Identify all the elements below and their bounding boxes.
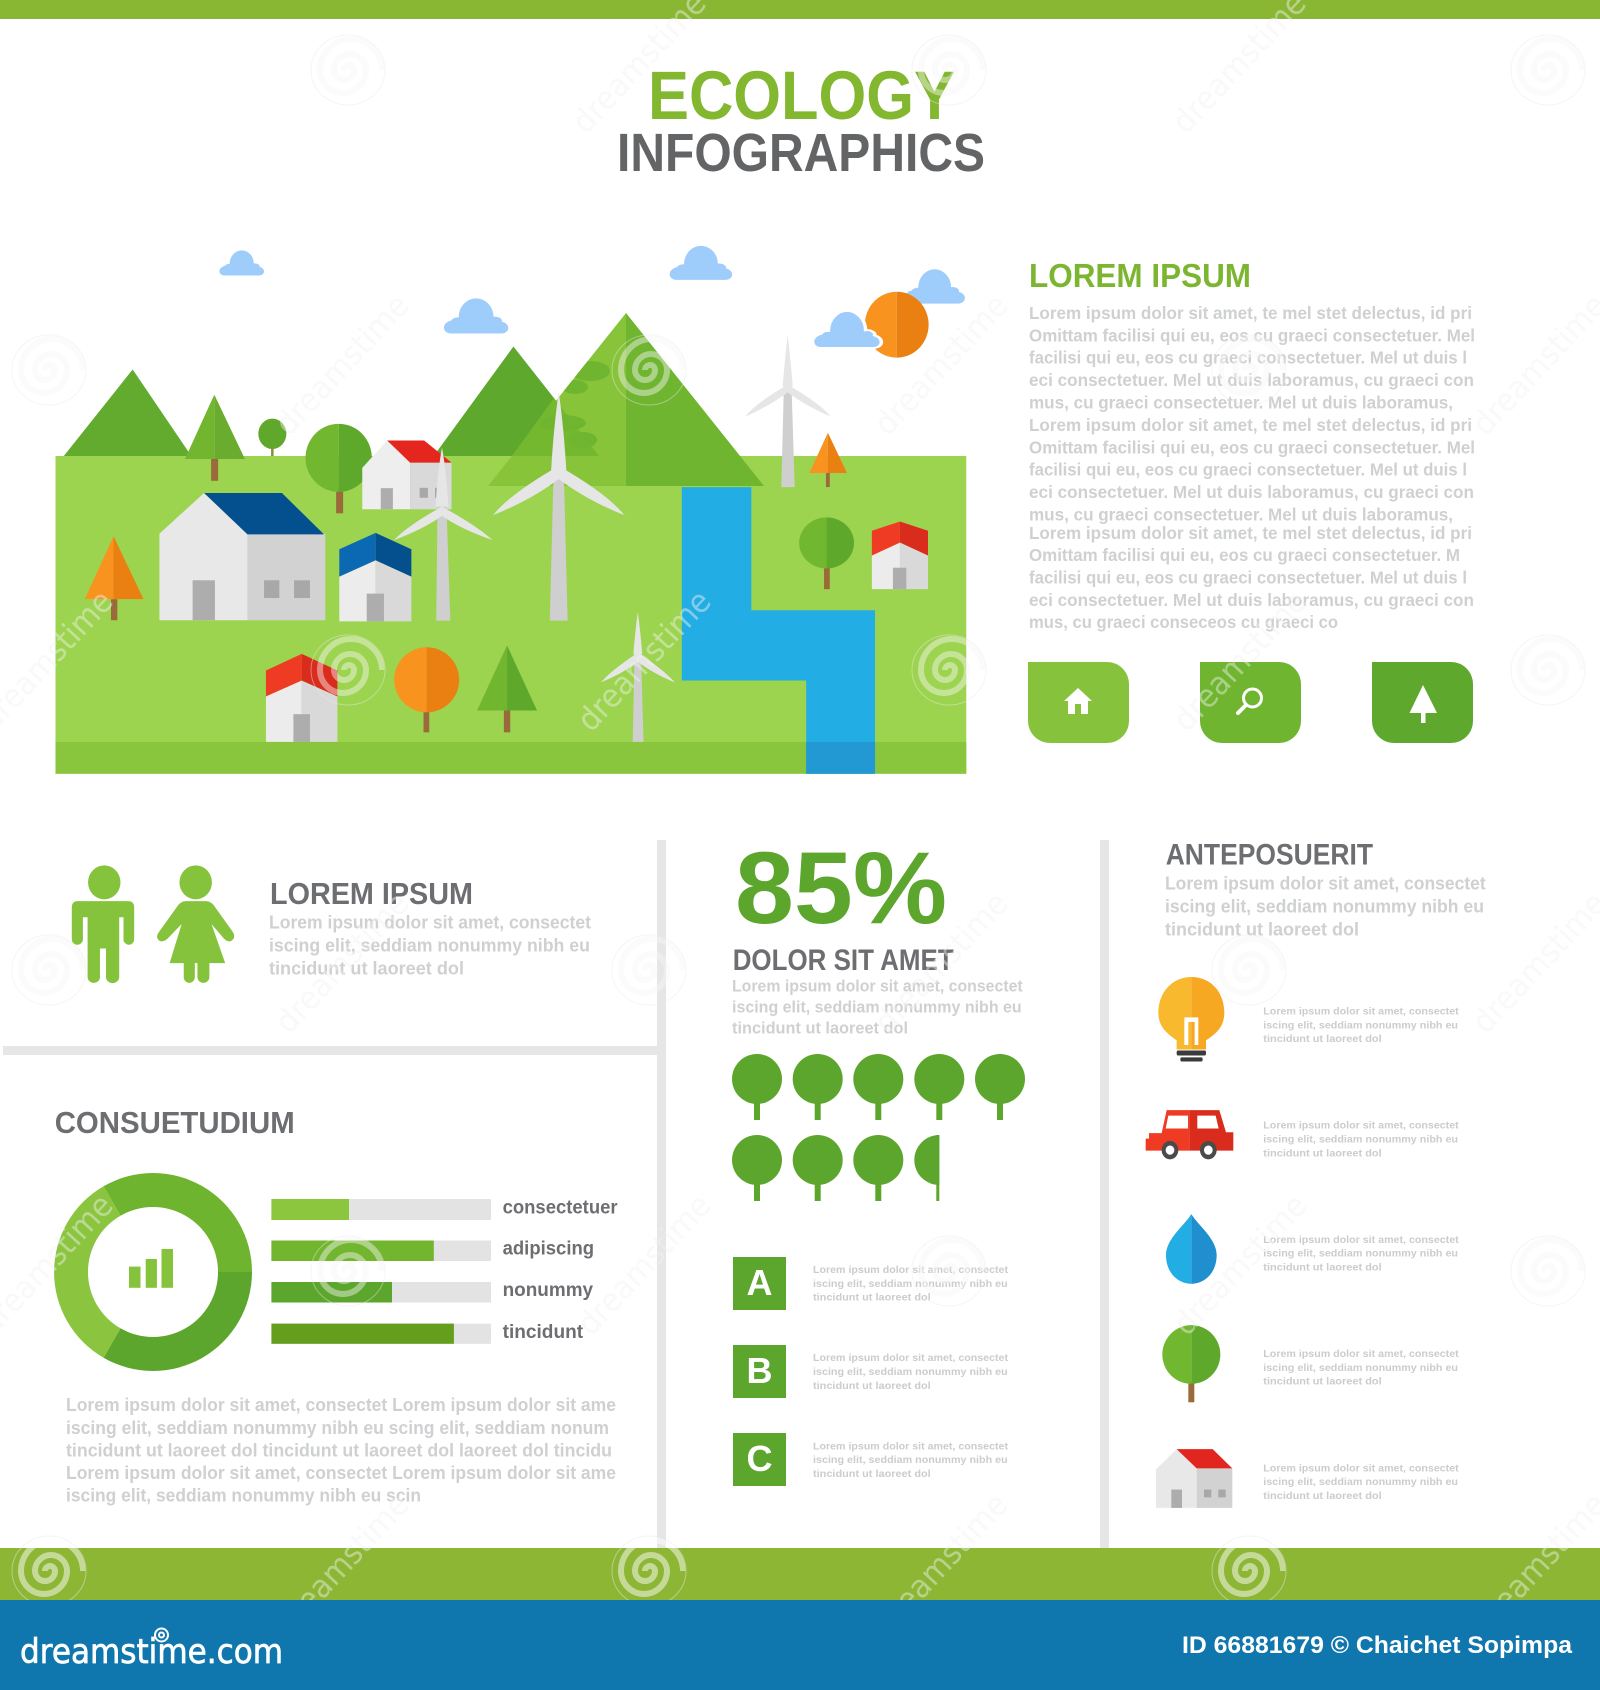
item text: house	[1263, 1462, 1459, 1502]
text block: tincidunt ut laoreet dol	[732, 1018, 908, 1037]
item B: tincidunt ut laoreet dol	[813, 1380, 931, 1392]
donut chart	[54, 1173, 252, 1371]
panel: statistics	[732, 831, 1025, 1486]
orange cone tree left	[85, 536, 144, 620]
small tree	[258, 419, 286, 456]
item B: Lorem ipsum dolor sit amet, consectet	[813, 1352, 1009, 1364]
item text: car: tincidunt ut laoreet dol	[1263, 1147, 1382, 1159]
heading: lorem ipsum green: LOREM IPSUM	[1029, 257, 1251, 294]
watermark overlay: dreamstime	[1165, 582, 1315, 739]
item text: water: iscing elit, seddiam nonummy nibh eu	[1263, 1248, 1458, 1260]
panel: people	[72, 865, 591, 983]
wind turbine lower	[601, 612, 675, 742]
item text: car	[1263, 1119, 1459, 1159]
item A: tincidunt ut laoreet dol	[813, 1292, 931, 1304]
pine tree	[185, 395, 245, 481]
text block: iscing elit, seddiam nonummy nibh eu scing elit, seddiam nonum	[66, 1418, 609, 1438]
panel divider: vertical right	[1100, 840, 1109, 1548]
item text: car: iscing elit, seddiam nonummy nibh eu	[1263, 1134, 1458, 1146]
item B: B	[746, 1350, 772, 1391]
footer logo spiral	[155, 1628, 168, 1642]
long body text: eci consectetuer. Mel ut duis laboramus, cu graeci con	[1029, 482, 1474, 502]
item A	[733, 1257, 1009, 1310]
icon: water drop	[1166, 1214, 1217, 1284]
bar chart: tincidunt	[503, 1322, 584, 1343]
clouds and sun	[219, 246, 965, 358]
long body text: Lorem ipsum dolor sit amet, te mel stet delectus, id pri	[1029, 523, 1472, 543]
long body text: eci consectetuer. Mel ut duis laboramus, cu graeci con	[1029, 590, 1474, 610]
item text: car: Lorem ipsum dolor sit amet, consectet	[1263, 1119, 1459, 1131]
text block: iscing elit, seddiam nonummy nibh eu	[1165, 897, 1484, 917]
text block: tincidunt ut laoreet dol	[269, 959, 464, 979]
title line: infographics: INFOGRAPHICS	[617, 123, 985, 183]
text block: iscing elit, seddiam nonummy nibh eu	[269, 936, 590, 956]
item B	[733, 1345, 1009, 1398]
bar chart: nonummy	[503, 1280, 594, 1301]
text block	[1165, 874, 1486, 940]
item C	[733, 1433, 1009, 1486]
title	[617, 57, 985, 183]
big mountain	[488, 313, 764, 486]
heading: anteposuerit: ANTEPOSUERIT	[1166, 838, 1373, 871]
long body text: Lorem ipsum dolor sit amet, te mel stet delectus, id pri	[1029, 303, 1472, 323]
watermark overlay: dreamstime	[866, 1485, 1016, 1642]
item text: house: tincidunt ut laoreet dol	[1263, 1490, 1382, 1502]
icon: bar chart	[129, 1249, 173, 1288]
watermark overlay: dreamstime	[569, 582, 719, 739]
watermark overlay: dreamstime	[267, 1485, 417, 1642]
top red house	[362, 440, 452, 509]
title line: ecology: ECOLOGY	[648, 57, 955, 134]
watermark overlay: dreamstime	[267, 286, 417, 443]
mountains behind	[64, 347, 600, 456]
long body text: mus, cu graeci conseceos cu graeci co	[1029, 612, 1338, 632]
icon: house	[1156, 1449, 1232, 1508]
button: tree	[1372, 662, 1473, 743]
long body text: Omittam facilisi qui eu, eos cu graeci consectetuer. Mel	[1029, 325, 1475, 345]
long body text: facilisi qui eu, eos cu graeci consectetuer. Mel ut duis l	[1029, 568, 1467, 588]
tree by river	[799, 517, 854, 589]
icon: woman	[157, 865, 234, 983]
watermark overlay: dreamstime	[866, 884, 1016, 1041]
small red house right	[872, 521, 928, 589]
grass field	[55, 456, 966, 774]
text block: Lorem ipsum dolor sit amet, consectet	[732, 977, 1023, 996]
item text: tree	[1263, 1348, 1459, 1388]
button: search	[1200, 662, 1301, 743]
long body text: Omittam facilisi qui eu, eos cu graeci consectetuer. Mel	[1029, 437, 1475, 457]
wind turbine small middle	[394, 447, 492, 621]
footer credit: ID 66881679 © Chaichet Sopimpa	[1182, 1632, 1573, 1659]
panel: anteposuerit	[1146, 838, 1486, 1508]
long body text: eci consectetuer. Mel ut duis laboramus, cu graeci con	[1029, 370, 1474, 390]
pictogram: trees 85 percent	[732, 1054, 1025, 1201]
orange cone tree far	[809, 433, 847, 487]
top green bar	[0, 0, 1600, 19]
text block: Lorem ipsum dolor sit amet, consectet Lorem ipsum dolor sit ame	[66, 1395, 616, 1415]
large house blue roof	[159, 493, 325, 620]
text block	[66, 1395, 616, 1506]
item text: house: Lorem ipsum dolor sit amet, consectet	[1263, 1462, 1459, 1474]
long body text: mus, cu graeci consectetuer. Mel ut duis laboramus,	[1029, 504, 1453, 524]
item text: tree: iscing elit, seddiam nonummy nibh eu	[1263, 1362, 1458, 1374]
item text: tree: Lorem ipsum dolor sit amet, consectet	[1263, 1348, 1459, 1360]
text block: Lorem ipsum dolor sit amet, consectet	[1165, 874, 1486, 894]
item text: bulb: Lorem ipsum dolor sit amet, consectet	[1263, 1006, 1459, 1018]
item A: A	[746, 1262, 772, 1303]
long body text: Omittam facilisi qui eu, eos cu graeci consectetuer. M	[1029, 545, 1460, 565]
orange round tree	[394, 647, 459, 732]
text block	[732, 977, 1023, 1037]
item text: tree: tincidunt ut laoreet dol	[1263, 1376, 1382, 1388]
text block: iscing elit, seddiam nonummy nibh eu scin	[66, 1486, 421, 1506]
watermark overlay: dreamstime	[569, 1186, 719, 1343]
item text: bulb: iscing elit, seddiam nonummy nibh eu	[1263, 1019, 1458, 1031]
text block: iscing elit, seddiam nonummy nibh eu	[732, 998, 1022, 1017]
item C: tincidunt ut laoreet dol	[813, 1468, 931, 1480]
round tree	[306, 424, 372, 513]
panel: consuetudium	[54, 1105, 618, 1506]
red house lower	[266, 654, 337, 742]
footer logo: dreamstime.com	[20, 1632, 283, 1672]
icon: man	[72, 865, 134, 983]
button: home	[1028, 662, 1129, 743]
text block: tincidunt ut laoreet dol	[1165, 920, 1359, 940]
item text: bulb	[1263, 1006, 1459, 1045]
item text: bulb: tincidunt ut laoreet dol	[1263, 1033, 1382, 1045]
bar chart	[271, 1197, 618, 1344]
bar chart: consectetuer	[503, 1197, 618, 1218]
small blue house	[339, 533, 411, 621]
long body text: Lorem ipsum dolor sit amet, te mel stet delectus, id pri	[1029, 415, 1472, 435]
long body text: facilisi qui eu, eos cu graeci consectetuer. Mel ut duis l	[1029, 460, 1467, 480]
item C: Lorem ipsum dolor sit amet, consectet	[813, 1440, 1009, 1452]
text block: tincidunt ut laoreet dol tincidunt ut laoreet dol laoreet dol tincidu	[66, 1440, 612, 1460]
landscape illustration	[55, 246, 966, 774]
item text: house: iscing elit, seddiam nonummy nibh eu	[1263, 1476, 1458, 1488]
bottom green band	[0, 1548, 1600, 1600]
item B: iscing elit, seddiam nonummy nibh eu	[813, 1366, 1008, 1378]
item A: iscing elit, seddiam nonummy nibh eu	[813, 1278, 1008, 1290]
heading: consuetudium: CONSUETUDIUM	[55, 1105, 295, 1140]
watermark overlay: dreamstime	[1165, 1186, 1315, 1343]
foreground grass strip	[55, 742, 966, 774]
item C: C	[746, 1438, 772, 1479]
text block: Lorem ipsum dolor sit amet, consectet Lorem ipsum dolor sit ame	[66, 1463, 616, 1483]
footer: blue band	[0, 1600, 1600, 1690]
text block: Lorem ipsum dolor sit amet, consectet	[269, 913, 591, 933]
long body text: mus, cu graeci consectetuer. Mel ut duis laboramus,	[1029, 392, 1453, 412]
watermark overlay: dreamstime	[866, 286, 1016, 443]
item text: water: Lorem ipsum dolor sit amet, consectet	[1263, 1234, 1459, 1246]
text block	[269, 913, 591, 979]
long body text: facilisi qui eu, eos cu graeci consectetuer. Mel ut duis l	[1029, 348, 1467, 368]
item C: iscing elit, seddiam nonummy nibh eu	[813, 1454, 1008, 1466]
item text: water: tincidunt ut laoreet dol	[1263, 1261, 1382, 1273]
wind turbine large	[493, 392, 624, 621]
item A: Lorem ipsum dolor sit amet, consectet	[813, 1264, 1009, 1276]
heading: lorem ipsum grey: LOREM IPSUM	[270, 876, 473, 911]
panel divider: horizontal	[3, 1046, 657, 1055]
green pine lower	[477, 645, 537, 732]
icon: tree	[1162, 1325, 1220, 1402]
watermark overlay: dreamstime	[267, 884, 417, 1041]
heading: dolor sit amet: DOLOR SIT AMET	[733, 944, 954, 977]
panel divider: vertical left	[657, 840, 666, 1548]
icon: light bulb	[1158, 977, 1224, 1061]
item text: water	[1263, 1234, 1459, 1273]
bar chart: adipiscing	[503, 1239, 594, 1260]
long body text	[1029, 303, 1475, 632]
wind turbine far	[745, 335, 831, 487]
big number 85%: 85%	[735, 831, 947, 945]
icon: car	[1146, 1110, 1233, 1159]
river	[682, 487, 875, 774]
